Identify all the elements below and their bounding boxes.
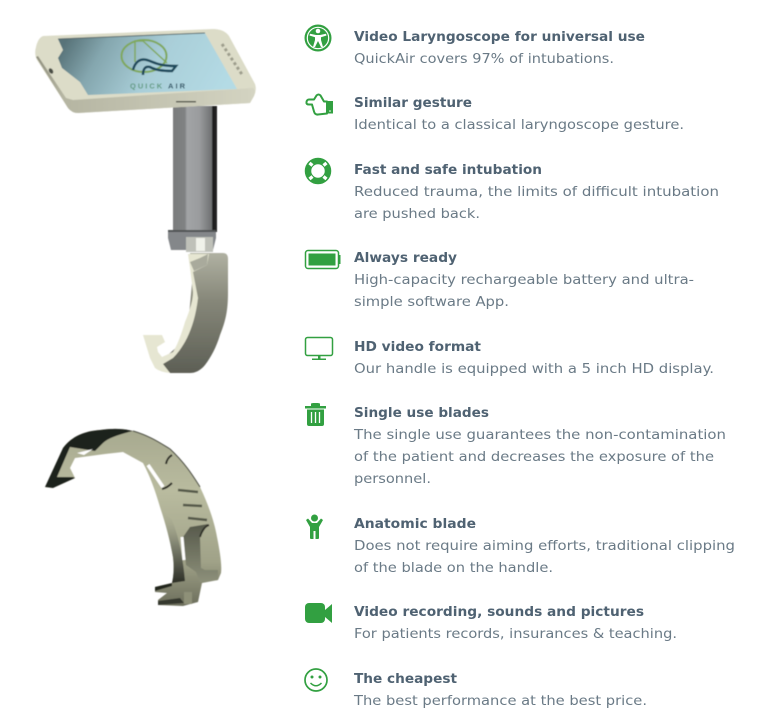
text: title: Video recording, sounds and pictures — [354, 604, 644, 620]
item: similar gesture — [306, 94, 684, 133]
text: description: The single use guarantees the non-contamination — [353, 427, 726, 443]
item: single use blades: of the patient and decreases the exposure of the — [354, 449, 714, 465]
text: description: The best performance at the best price. — [353, 693, 647, 709]
text: description: Does not require aiming efforts, traditional clipping — [354, 538, 735, 554]
text: description: Our handle is equipped with a 5 inch HD display. — [354, 361, 714, 377]
icon: monitor — [306, 338, 332, 360]
item: the cheapest — [305, 669, 647, 709]
text: description: Identical to a classical laryngoscope gesture. — [354, 117, 684, 133]
icon: child figure — [306, 514, 323, 539]
text: title: Fast and safe intubation — [354, 162, 542, 178]
text: title: Anatomic blade — [354, 516, 476, 532]
item: fast and safe intubation: are pushed back. — [354, 206, 480, 222]
text: title: HD video format — [354, 339, 482, 355]
icon: life ring — [306, 158, 330, 184]
slots and ribs — [148, 465, 163, 487]
icon: pointing hand — [306, 94, 333, 115]
text: title: Single use blades — [354, 405, 489, 421]
black top ridge — [45, 429, 133, 488]
item: fast and safe intubation — [306, 158, 719, 222]
icon: accessibility person — [304, 24, 332, 52]
item: always ready — [306, 250, 694, 310]
text: description: QuickAir covers 97% of intubations. — [354, 51, 614, 67]
text: description: High-capacity rechargeable battery and ultra- — [354, 272, 694, 288]
item: anatomic blade — [306, 514, 735, 576]
icon: trash can — [305, 403, 326, 426]
QuickAir logo on screen — [122, 40, 186, 90]
text: description: For patients records, insurances & teaching. — [354, 626, 677, 642]
item: anatomic blade: of the blade on the handle. — [354, 560, 553, 576]
lower blade shading — [160, 507, 185, 583]
icon: battery — [306, 250, 340, 268]
item: single use blades: personnel. — [354, 471, 431, 487]
item: single use blades — [305, 403, 726, 487]
item: HD video format — [306, 338, 714, 377]
text: title: Video Laryngoscope for universal use — [354, 29, 645, 45]
image: single use blade — [45, 429, 221, 606]
item: always ready: simple software App. — [354, 294, 509, 310]
text: title: Similar gesture — [354, 95, 472, 111]
text: description: Reduced trauma, the limits of difficult intubation — [354, 184, 719, 200]
icon: smiley — [305, 669, 327, 691]
item: video recording — [305, 603, 677, 642]
text: title: Always ready — [354, 250, 457, 266]
display body — [35, 29, 256, 113]
blade foot — [155, 583, 172, 591]
item: universal use — [304, 24, 645, 67]
text: title: The cheapest — [354, 671, 458, 687]
image: QuickAir video laryngoscope with handle and blade — [35, 29, 256, 373]
blade attached to handle — [143, 253, 228, 373]
handle — [168, 106, 217, 252]
QuickAir logo on screen: QUICK AIR — [130, 82, 186, 90]
icon: video camera — [305, 603, 332, 623]
